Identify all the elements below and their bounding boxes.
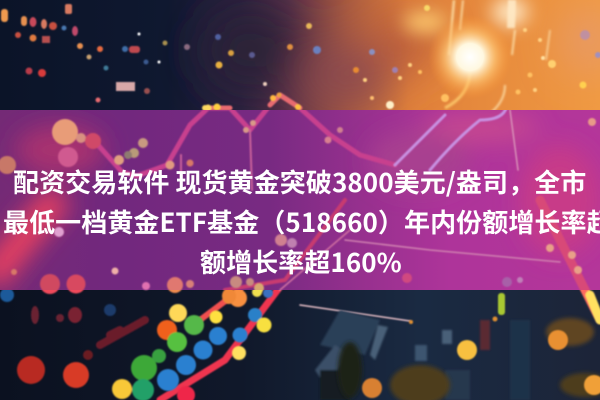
magenta title band (0, 110, 600, 290)
glowing burst and light streaks top right (306, 0, 600, 125)
bokeh: small lights top left (1, 4, 293, 94)
city blocks and orange bokeh bottom right (315, 293, 600, 400)
headline line 3: 额增长率超160% (200, 243, 402, 280)
headline line 2: 最低一档黄金ETF基金（518660）年内份额增长率超 (3, 203, 600, 240)
chart and bokeh showing through the band (0, 110, 600, 290)
headline line 1: 配资交易软件 现货黄金突破3800美元/盎司，全市 (13, 163, 586, 200)
lights spilling below the band (40, 92, 600, 400)
headline text block (3, 163, 600, 280)
bokeh: coloured light cluster bottom left (0, 287, 273, 400)
